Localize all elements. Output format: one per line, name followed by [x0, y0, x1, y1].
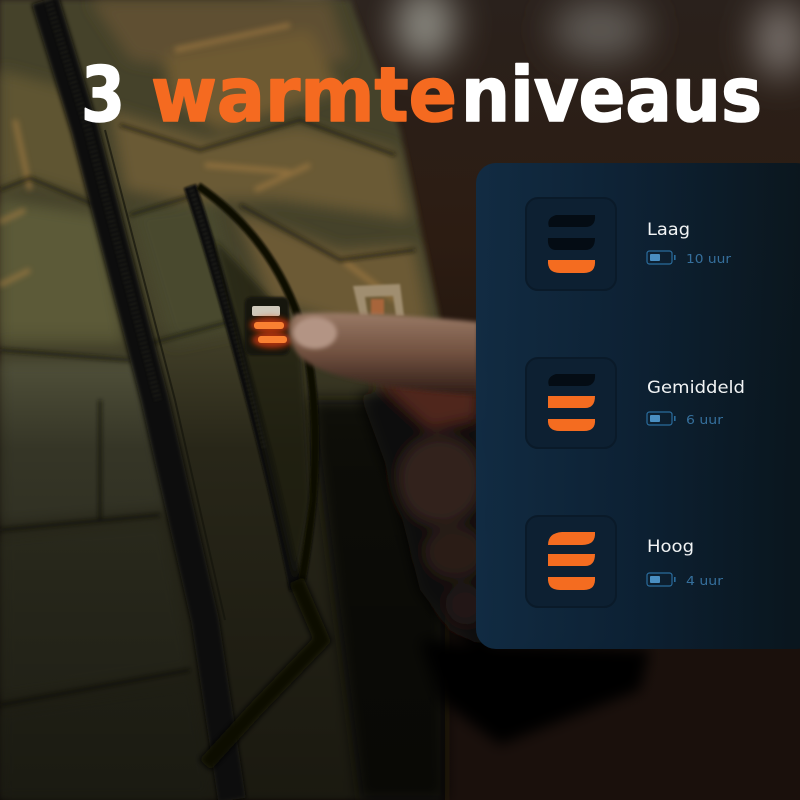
info panel	[476, 163, 800, 649]
photo: quilted olive jacket	[0, 0, 445, 800]
label: Gemiddeld	[647, 378, 745, 397]
battery runtime	[647, 412, 724, 427]
title: warmte	[151, 50, 457, 139]
icon: two of three bars lit	[526, 358, 616, 448]
photo: jacket logo patch	[353, 284, 404, 316]
photo: glowing control button	[245, 297, 292, 355]
quilt seams	[0, 120, 415, 705]
battery runtime: 10 uur	[686, 251, 732, 266]
level row: Laag	[526, 198, 732, 290]
battery runtime	[647, 573, 724, 588]
photo: hand and pressing finger	[289, 313, 650, 745]
jacket tonal patches	[0, 0, 445, 800]
label: Hoog	[647, 537, 694, 556]
title: niveaus	[461, 50, 762, 139]
photo: pocket zipper	[190, 186, 322, 765]
icon: three bars lit	[526, 516, 616, 607]
battery runtime: 4 uur	[686, 573, 724, 588]
level row: Hoog	[526, 516, 724, 607]
label: Laag	[647, 220, 690, 239]
photo: centre zipper	[45, 0, 232, 800]
battery runtime	[647, 251, 732, 266]
title: 3	[81, 50, 125, 139]
title	[81, 50, 762, 139]
dim lower half of the photo	[0, 0, 445, 800]
battery runtime: 6 uur	[686, 412, 724, 427]
warm quilt glints	[0, 25, 395, 300]
level row: Gemiddeld	[526, 358, 745, 448]
icon: one of three bars lit	[526, 198, 616, 290]
